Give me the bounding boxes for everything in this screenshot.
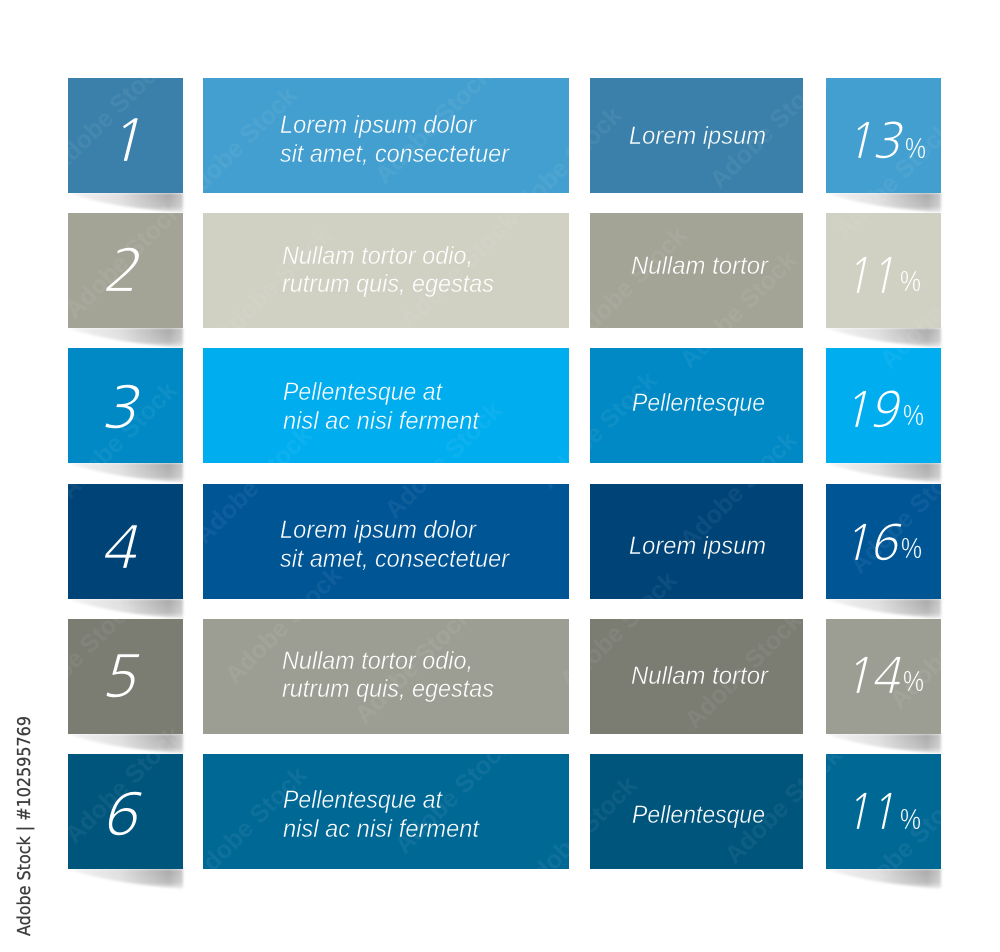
number tile 1 xyxy=(68,78,183,193)
label 3 xyxy=(590,348,803,463)
description 6: Pellentesque at xyxy=(283,786,443,814)
description 1: sit amet, consectetuer xyxy=(280,140,511,168)
label 6 xyxy=(590,754,803,869)
panel: row 6 xyxy=(68,754,946,891)
description 2: rutrum quis, egestas xyxy=(282,270,494,298)
percent 16: 16 xyxy=(841,519,902,568)
label 5: Nullam tortor xyxy=(631,662,770,690)
watermark pattern: Adobe Stock xyxy=(184,761,312,889)
label 2: Nullam tortor xyxy=(631,252,770,280)
number tile 3: 3 xyxy=(101,379,141,437)
panel: row 4 xyxy=(68,484,946,621)
label 4 xyxy=(590,484,803,599)
shadow: row 1 percent xyxy=(826,193,946,215)
label 1: Lorem ipsum xyxy=(629,122,766,150)
watermark pattern: Adobe Stock xyxy=(59,721,187,849)
watermark pattern: Adobe Stock xyxy=(209,221,337,349)
description 5 xyxy=(203,619,569,734)
label 4: Lorem ipsum xyxy=(629,532,766,560)
watermark pattern: Adobe Stock xyxy=(59,196,187,324)
watermark pattern: Adobe Stock xyxy=(874,246,1000,374)
number tile 2 xyxy=(68,213,183,328)
description 5: rutrum quis, egestas xyxy=(282,675,494,703)
number tile 6: 6 xyxy=(101,786,143,844)
percent 14: % xyxy=(903,666,924,698)
percent 13: 13 xyxy=(844,117,904,166)
description 4: Lorem ipsum dolor xyxy=(280,516,478,544)
watermark pattern: Adobe Stock xyxy=(704,66,832,194)
shadow: row 6 number xyxy=(68,869,188,891)
label 5 xyxy=(590,619,803,734)
percent 19: 19 xyxy=(841,386,903,435)
shadow: row 5 percent xyxy=(826,734,946,756)
watermark pattern: Adobe Stock xyxy=(534,366,662,494)
watermark pattern: Adobe Stock xyxy=(389,731,517,859)
stock id caption: Adobe Stock | #102595769 xyxy=(14,716,35,936)
watermark pattern: Adobe Stock xyxy=(379,396,507,524)
percent 14 xyxy=(826,619,941,734)
watermark pattern: Adobe Stock xyxy=(394,206,522,334)
description 3 xyxy=(203,348,569,463)
watermark pattern: Adobe Stock xyxy=(174,81,302,209)
number tile 1: 1 xyxy=(106,112,141,170)
watermark pattern: Adobe Stock xyxy=(44,51,172,179)
watermark pattern: Adobe Stock xyxy=(674,426,802,554)
watermark pattern: Adobe Stock xyxy=(499,101,627,229)
description 4: sit amet, consectetuer xyxy=(280,545,511,573)
panel: row 3 xyxy=(68,348,946,485)
percent 11 xyxy=(826,213,941,328)
watermark pattern: Adobe Stock xyxy=(674,246,802,374)
number tile 3 xyxy=(68,348,183,463)
watermark pattern: Adobe Stock xyxy=(844,781,972,909)
percent 11: 11 xyxy=(844,252,894,301)
percent 19: % xyxy=(903,400,924,432)
description 6 xyxy=(203,754,569,869)
percent 11: % xyxy=(900,266,921,298)
shadow: row 2 percent xyxy=(826,328,946,350)
description 6: nisl ac nisi ferment xyxy=(283,815,480,843)
shadow: row 6 percent xyxy=(826,869,946,891)
label 6: Pellentesque xyxy=(632,801,765,829)
number tile 4 xyxy=(68,484,183,599)
description 1 xyxy=(203,78,569,193)
shadow: row 4 percent xyxy=(826,599,946,621)
percent 13: % xyxy=(905,133,926,165)
percent 11 second: % xyxy=(900,804,921,836)
panel: row 5 xyxy=(68,619,946,756)
shadow: row 1 number xyxy=(68,193,188,215)
watermark pattern: Adobe Stock xyxy=(189,421,317,549)
watermark pattern: Adobe Stock xyxy=(564,221,692,349)
watermark pattern: Adobe Stock xyxy=(679,606,807,734)
shadow: row 4 number xyxy=(68,599,188,621)
percent 11 second: 11 xyxy=(844,788,894,837)
description 2: Nullam tortor odio, xyxy=(282,242,473,270)
description 4 xyxy=(203,484,569,599)
shadow: row 5 number xyxy=(68,734,188,756)
description 2 xyxy=(203,213,569,328)
label 2 xyxy=(590,213,803,328)
watermark pattern: Adobe Stock xyxy=(829,116,957,244)
description 5: Nullam tortor odio, xyxy=(282,647,473,675)
number tile 5: 5 xyxy=(100,648,140,706)
percent 19 xyxy=(826,348,941,463)
watermark pattern: Adobe Stock xyxy=(349,601,477,729)
watermark pattern: Adobe Stock xyxy=(369,61,497,189)
watermark pattern: Adobe Stock xyxy=(514,771,642,899)
number tile 5 xyxy=(68,619,183,734)
description 1: Lorem ipsum dolor xyxy=(280,111,478,139)
panel: row 2 xyxy=(68,213,946,350)
percent 16 xyxy=(826,484,941,599)
shadow: row 3 percent xyxy=(826,463,946,485)
description 3: Pellentesque at xyxy=(283,378,443,406)
watermark pattern: Adobe Stock xyxy=(554,566,682,694)
watermark pattern: Adobe Stock xyxy=(14,591,142,719)
shadow: row 3 number xyxy=(68,463,188,485)
number tile 4: 4 xyxy=(100,519,138,577)
label 3: Pellentesque xyxy=(632,389,765,417)
number tile 2: 2 xyxy=(102,242,141,300)
watermark pattern: Adobe Stock xyxy=(219,561,347,689)
watermark pattern: Adobe Stock xyxy=(54,376,182,504)
percent 11 second xyxy=(826,754,941,869)
shadow: row 2 number xyxy=(68,328,188,350)
percent 16: % xyxy=(901,533,922,565)
description 3: nisl ac nisi ferment xyxy=(283,407,480,435)
label 1 xyxy=(590,78,803,193)
percent 14: 14 xyxy=(842,652,901,701)
panel: row 1 xyxy=(68,78,946,215)
watermark pattern: Adobe Stock xyxy=(844,451,972,579)
watermark pattern: Adobe Stock xyxy=(719,741,847,869)
number tile 6 xyxy=(68,754,183,869)
percent 13 xyxy=(826,78,941,193)
